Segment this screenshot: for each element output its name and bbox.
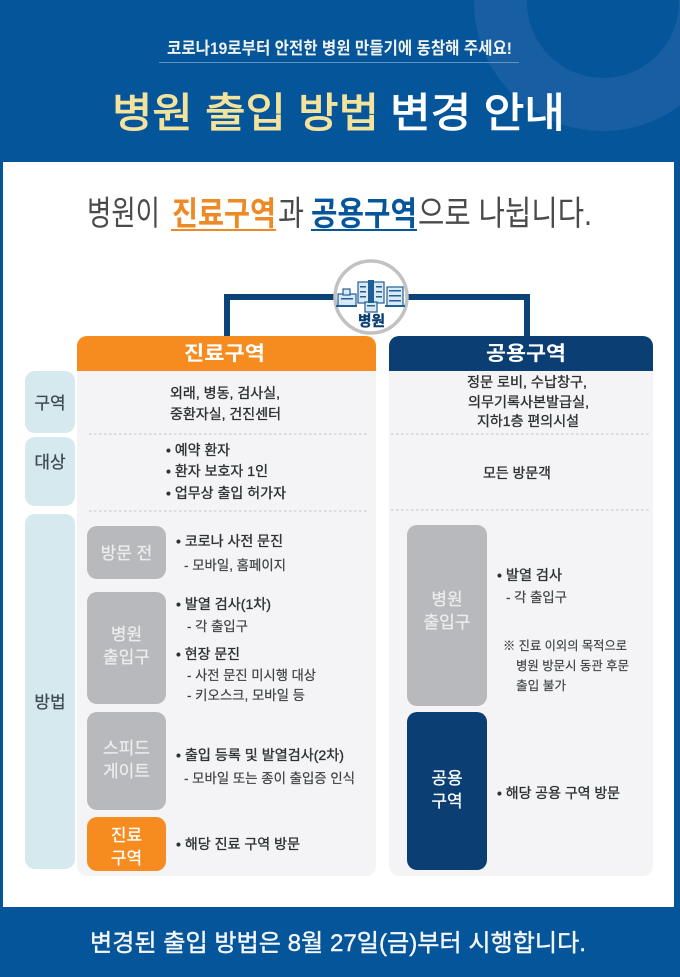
note: non-medical visitors: 병원 방문시 동관 후문 <box>516 659 629 673</box>
step: speed gate <box>87 712 166 810</box>
step: before visit: 방문 전 <box>101 544 152 563</box>
text: speed gate <box>176 747 355 786</box>
text: medical zone visitors: • 예약 환자 <box>166 442 230 458</box>
heading: hospital is divided into two zones: 과 <box>278 195 304 233</box>
heading: hospital is divided into two zones: 공용구역 <box>311 195 417 232</box>
text: fever check: • 발열 검사 <box>497 567 562 583</box>
text: public zone areas: 지하1층 편의시설 <box>477 413 579 429</box>
text: medical zone visitors <box>166 442 286 501</box>
text: medical zone areas: 중환자실, 건진센터 <box>170 406 281 422</box>
header: medical zone: 진료구역 <box>184 342 265 365</box>
text: medical zone visitors: • 업무상 출입 허가자 <box>166 485 286 501</box>
main title: 병원 출입 방법 <box>112 90 379 136</box>
subtitle banner text: 코로나19로부터 안전한 병원 만들기에 동참해 주세요! <box>167 39 512 58</box>
text: public zone areas: 정문 로비, 수납창구, <box>467 374 587 390</box>
text: public zone visitors: 모든 방문객 <box>483 465 551 481</box>
white content panel <box>3 162 674 907</box>
footer notice: 변경된 출입 방법은 8월 27일(금)부터 시행합니다. <box>90 930 586 957</box>
icon: hospital: 병원 <box>358 313 385 330</box>
header: public zone: 공용구역 <box>486 342 566 365</box>
note: non-medical visitors: ※ 진료 이외의 목적으로 <box>503 639 627 653</box>
step: hospital entrance: 출입구 <box>424 613 470 632</box>
text: public zone areas <box>467 374 589 429</box>
row label: method <box>25 514 75 869</box>
step: hospital entrance <box>87 592 166 704</box>
text: fever check <box>497 567 567 605</box>
note: non-medical visitors: 출입 불가 <box>516 679 566 693</box>
text: before visit: • 코로나 사전 문진 <box>176 533 283 549</box>
heading: hospital is divided into two zones: 으로 나뉩니다. <box>418 195 592 233</box>
row label: method: 방법 <box>34 693 66 712</box>
text: fever check: - 각 출입구 <box>506 590 567 605</box>
text: before visit: - 모바일, 홈페이지 <box>184 558 286 573</box>
text: hospital entrance: • 현장 문진 <box>176 646 240 662</box>
step: speed gate: 게이트 <box>103 762 150 781</box>
header banner <box>112 0 680 136</box>
step: public zone: 구역 <box>431 792 463 811</box>
step: hospital entrance <box>407 525 487 706</box>
step: medical zone: 진료 <box>111 826 142 845</box>
row label: zone: 구역 <box>34 394 66 413</box>
text: before visit <box>176 533 286 573</box>
text: hospital entrance: - 사전 문진 미시행 대상 <box>187 668 316 683</box>
text: hospital entrance <box>176 596 316 703</box>
panel: public zone <box>389 336 653 876</box>
main title: 변경 안내 <box>390 90 565 136</box>
heading: hospital is divided into two zones: 병원이 <box>87 195 160 233</box>
panel: medical zone <box>77 336 376 876</box>
text: visit public zone: • 해당 공용 구역 방문 <box>497 785 620 801</box>
text: hospital entrance: - 키오스크, 모바일 등 <box>187 688 305 703</box>
text: visit medical zone: • 해당 진료 구역 방문 <box>176 836 300 852</box>
step: before visit <box>87 526 166 579</box>
row label: visitors: 대상 <box>34 453 66 472</box>
connector lines <box>227 297 527 336</box>
main title <box>112 90 565 136</box>
header: public zone <box>389 336 653 371</box>
step: public zone <box>407 712 487 870</box>
header: medical zone <box>77 336 376 371</box>
text: hospital entrance: • 발열 검사(1차) <box>176 596 271 612</box>
step: public zone: 공용 <box>431 769 463 788</box>
note: non-medical visitors <box>503 639 629 693</box>
text: speed gate: • 출입 등록 및 발열검사(2차) <box>176 747 344 763</box>
row label: zone <box>25 371 75 433</box>
text: medical zone areas <box>170 385 281 422</box>
row label: visitors <box>25 437 75 506</box>
step: medical zone <box>87 817 166 871</box>
step: speed gate: 스피드 <box>103 739 150 758</box>
text: public zone areas: 의무기록사본발급실, <box>468 394 589 410</box>
step: medical zone: 구역 <box>111 849 142 868</box>
step: hospital entrance: 병원 <box>431 590 463 609</box>
heading: hospital is divided into two zones: 진료구역 <box>172 195 276 232</box>
text: medical zone areas: 외래, 병동, 검사실, <box>170 385 280 401</box>
text: medical zone visitors: • 환자 보호자 1인 <box>166 463 268 479</box>
heading: hospital is divided into two zones <box>87 195 592 233</box>
step: hospital entrance: 출입구 <box>103 648 150 667</box>
text: hospital entrance: - 각 출입구 <box>187 619 248 634</box>
text: speed gate: - 모바일 또는 종이 출입증 인식 <box>184 771 355 786</box>
icon: hospital <box>335 261 407 333</box>
step: hospital entrance: 병원 <box>111 625 142 644</box>
